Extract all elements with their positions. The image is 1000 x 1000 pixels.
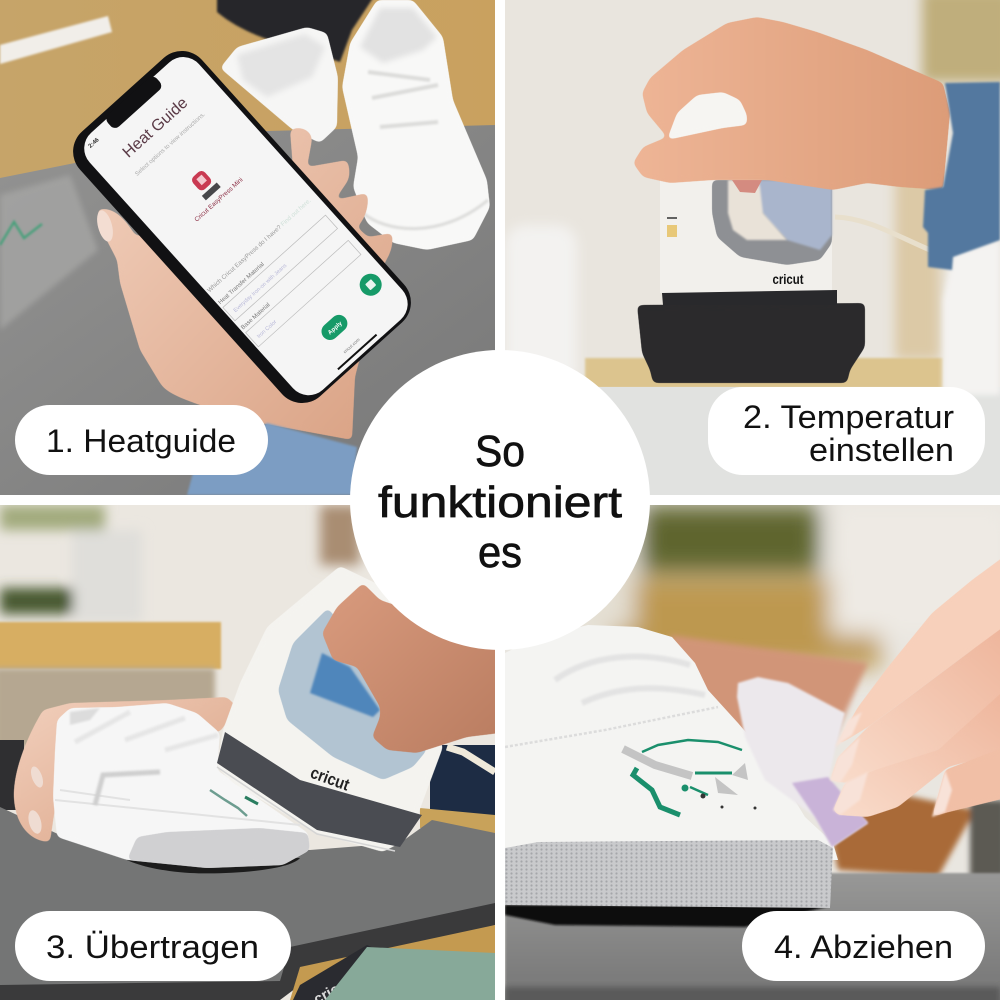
gray mat	[505, 873, 1000, 1000]
hand holding phone	[94, 128, 393, 440]
label: step 3: 3. Übertragen	[46, 929, 259, 965]
peeled transfer film	[737, 677, 868, 847]
green card	[325, 947, 495, 1000]
shoe shadow	[127, 858, 300, 873]
hand on press	[322, 583, 500, 753]
smartphone	[73, 51, 411, 403]
green circle button	[360, 274, 382, 296]
wood strip right	[420, 808, 495, 835]
denim sleeve	[187, 423, 357, 495]
notch	[106, 76, 162, 128]
mini press iron	[217, 566, 443, 852]
mat lower shade	[505, 987, 1000, 1000]
phone form: Iron Color	[256, 319, 278, 340]
phone form: Base Material	[240, 302, 272, 331]
cable	[447, 747, 495, 772]
green squiggle design	[210, 790, 247, 816]
iron brand: cricut	[772, 271, 804, 287]
large shoe	[505, 625, 838, 908]
finger 1	[835, 552, 1000, 747]
finger nails	[26, 765, 45, 835]
label: step 4: 4. Abziehen	[774, 929, 953, 965]
title line 3: es	[478, 528, 522, 577]
center circle title	[350, 350, 650, 650]
label: step 1: 1. Heatguide	[46, 423, 236, 459]
toe cap	[127, 828, 310, 868]
phone device name: Cricut EasyPress Mini	[193, 176, 245, 223]
phone status: 2:46	[88, 137, 101, 150]
blurred arm and sleeve	[670, 635, 1000, 885]
laces	[555, 657, 705, 703]
blurred tan wall stripe	[895, 170, 940, 360]
mini press iron	[660, 175, 837, 305]
panel: step 2 set temperature photo	[505, 0, 1000, 502]
phone subtitle: Select options to view instructions.	[134, 112, 207, 178]
table corner wood	[290, 925, 495, 1000]
apply button: Apply	[327, 320, 344, 336]
gray mat	[0, 807, 495, 985]
nails	[830, 712, 952, 817]
phone form: Everyday Iron-on with Jeans	[233, 263, 288, 314]
finger 3	[833, 685, 1000, 817]
white table top	[598, 387, 741, 390]
gray work mat	[0, 125, 495, 495]
right white shoe	[342, 0, 490, 250]
label: step 4	[742, 911, 985, 981]
shoe	[53, 703, 310, 868]
blurred foreground objects	[505, 224, 578, 371]
dark mat edge	[0, 890, 495, 1000]
phone screen	[76, 48, 416, 404]
rubber sole	[505, 840, 833, 908]
phone title: Heat Guide	[120, 94, 191, 161]
wooden table strip	[585, 358, 943, 388]
hand on press	[633, 17, 950, 190]
phone form: Heat Transfer Material	[218, 262, 266, 306]
panel: step 1 heat guide photo	[0, 0, 495, 495]
thumb nail	[97, 210, 113, 242]
dark background right	[430, 745, 500, 820]
press dome top	[667, 92, 747, 140]
left hand behind shoe	[14, 697, 237, 842]
title line 2: funktioniert	[378, 478, 622, 527]
dinosaur design	[623, 740, 756, 815]
phone question: Which Cricut EasyPress do I have? Find out here.	[206, 197, 313, 294]
hand peeling	[830, 552, 1000, 817]
blurred plant and vase	[0, 505, 360, 622]
blurred wall accent	[922, 0, 1000, 82]
phone form	[218, 209, 361, 347]
stitching	[505, 707, 718, 747]
phone body	[73, 51, 411, 403]
shoe shadow	[505, 905, 830, 927]
label: step 2: 2. Temperatur	[743, 399, 954, 435]
transfer sheet	[0, 175, 98, 330]
cable	[835, 217, 930, 250]
home indicator	[337, 334, 377, 370]
red device icon	[192, 171, 221, 200]
label: step 2	[708, 387, 985, 475]
tan wall below shelf	[0, 668, 215, 748]
press base	[637, 303, 865, 383]
dark packaging edge	[293, 945, 378, 1000]
white pen	[0, 16, 112, 64]
label: step 2: einstellen	[809, 432, 954, 468]
handle opening	[310, 653, 380, 717]
finger 2	[830, 622, 1000, 783]
finger 4	[932, 745, 1000, 817]
apply button	[322, 314, 348, 340]
dark press base at top	[217, 0, 377, 62]
title line 1: So	[475, 427, 525, 476]
left white shoe	[220, 27, 338, 143]
iron brand: cricut	[308, 763, 352, 795]
label: step 3	[15, 911, 291, 981]
url text: cricut.com	[342, 337, 361, 354]
yellow marks	[667, 217, 677, 219]
dark table edge left	[0, 740, 24, 810]
panel: step 4 peel off photo	[505, 505, 1000, 1000]
blurred background	[505, 505, 1000, 668]
panel: step 3 transfer photo	[0, 505, 500, 1000]
wooden shelf	[0, 622, 221, 669]
green design on sheet	[0, 222, 42, 245]
dark band	[217, 732, 422, 847]
label: step 1	[15, 405, 268, 475]
blue handle	[278, 608, 427, 780]
denim sleeve	[923, 82, 1000, 270]
